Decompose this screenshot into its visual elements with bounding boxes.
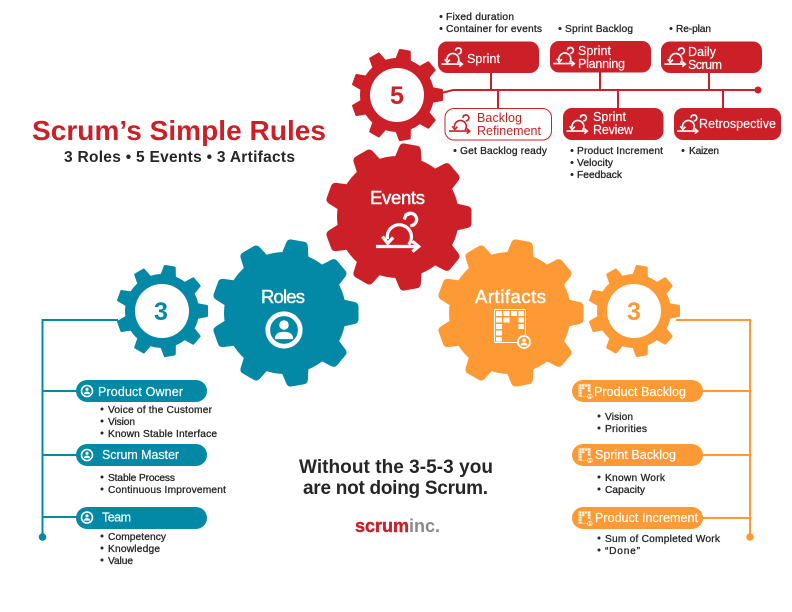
bullets: Sprint Planning: Sprint Backlog — [565, 24, 633, 35]
event: Backlog Refinement — [445, 108, 552, 140]
bullets: Scrum Master — [100, 473, 226, 496]
role: Product Owner: Product Owner — [98, 385, 183, 399]
artifact: Product Increment: Product Increment — [595, 511, 699, 525]
event: Sprint: Sprint — [467, 52, 501, 66]
subtitle: 3 Roles • 5 Events • 3 Artifacts — [64, 149, 295, 166]
artifact: Product Backlog — [572, 380, 703, 402]
bullets: Sprint: Container for events — [446, 24, 542, 35]
event: Sprint — [438, 42, 539, 73]
bullets: Sprint Backlog: Known Work — [605, 473, 666, 484]
artifact: Product Backlog: Product Backlog — [594, 385, 686, 399]
bullets: Product Backlog — [598, 412, 647, 435]
role: Team — [76, 507, 207, 529]
bullets: Team — [100, 532, 167, 567]
role: Scrum Master: Scrum Master — [102, 448, 179, 462]
event: Sprint Planning — [550, 41, 651, 72]
event: Retrospective — [674, 108, 781, 140]
gear: Roles — [211, 238, 358, 388]
event: Daily Scrum — [661, 42, 762, 73]
bullets: Product Owner: Vision — [108, 417, 135, 428]
bullets: Sprint: Fixed duration — [446, 12, 514, 23]
timeline connectors — [434, 72, 762, 108]
event: Sprint Review: Sprint — [593, 110, 627, 124]
bullets: Daily Scrum: Re-plan — [676, 24, 711, 35]
artifact: Sprint Backlog: Sprint Backlog — [595, 448, 676, 462]
event: Sprint Review — [563, 108, 664, 140]
gear: 3 artifacts — [588, 264, 680, 358]
panel: artifacts — [572, 264, 754, 557]
gear: 3 roles — [116, 264, 208, 358]
icon: backlog grid — [494, 310, 531, 349]
bullets: Product Backlog: Vision — [605, 412, 633, 423]
gear: Events: Events — [370, 187, 425, 208]
bullets: Product Owner: Voice of the Customer — [108, 405, 213, 416]
event: Sprint Planning: Planning — [578, 57, 625, 71]
icon: scrum loop — [376, 213, 419, 252]
bullets: Sprint Backlog — [598, 473, 666, 496]
bullets: Sprint Review — [570, 146, 663, 181]
bullets: Scrum Master: Stable Process — [108, 473, 175, 484]
bullets: Sprint Backlog: Capacity — [605, 485, 646, 496]
artifacts connectors — [676, 320, 754, 541]
bullets: Product Owner — [100, 405, 217, 440]
event: Retrospective: Retrospective — [699, 117, 776, 131]
event: Sprint Planning: Sprint — [578, 44, 612, 58]
role: Product Owner — [76, 380, 207, 402]
gear: Events — [324, 142, 472, 292]
bullets: Sprint Review: Velocity — [577, 158, 614, 169]
bullets: Product Increment: Sum of Completed Work — [605, 534, 721, 545]
bullets: Team: Knowledge — [108, 544, 160, 555]
gear: 5 events — [351, 48, 443, 142]
gear: Artifacts: Artifacts — [475, 286, 546, 307]
callout: without the 3-5-3: Without the 3-5-3 you — [299, 457, 493, 478]
panel: events timeline — [351, 12, 781, 181]
bullets: Sprint Review: Feedback — [577, 170, 623, 181]
panel: roles — [39, 264, 226, 567]
event: Sprint Review: Review — [593, 123, 634, 137]
roles connectors — [39, 320, 118, 541]
event: Daily Scrum: Daily — [688, 45, 717, 59]
gear: 5 events: 5 — [390, 82, 404, 110]
callout: without the 3-5-3 — [299, 457, 493, 499]
event: Backlog Refinement: Refinement — [477, 124, 542, 138]
bullets: Sprint — [440, 12, 542, 35]
bullets: Product Owner: Known Stable Interface — [108, 429, 217, 440]
event: Daily Scrum: Scrum — [688, 58, 722, 72]
artifact: Product Increment — [572, 507, 703, 529]
gear: Roles: Roles — [261, 286, 305, 307]
bullets: Retrospective: Kaizen — [689, 146, 719, 157]
bullets: Product Increment — [598, 534, 721, 557]
bullets: Product Increment: “Done” — [605, 546, 641, 557]
callout: without the 3-5-3: are not doing Scrum. — [303, 478, 488, 499]
title: Scrum’s Simple Rules — [32, 115, 326, 146]
role: Scrum Master — [76, 444, 207, 466]
gear: 3 artifacts: 3 — [627, 298, 641, 326]
icon: person — [268, 314, 300, 346]
bullets: Backlog Refinement: Get Backlog ready — [460, 146, 548, 157]
gear: Artifacts — [436, 238, 584, 388]
bullets: Team: Competency — [108, 532, 167, 543]
artifact: Sprint Backlog — [572, 444, 703, 466]
bullets: Sprint Review: Product Increment — [577, 146, 663, 157]
bullets: Scrum Master: Continuous Improvement — [108, 485, 226, 496]
bullets: Team: Value — [108, 556, 133, 567]
role: Team: Team — [102, 510, 131, 524]
event: Backlog Refinement: Backlog — [477, 111, 522, 125]
logo: scrum inc: scruminc. — [355, 516, 440, 536]
bullets: Product Backlog: Priorities — [605, 424, 647, 435]
gear: 3 roles: 3 — [154, 298, 168, 326]
